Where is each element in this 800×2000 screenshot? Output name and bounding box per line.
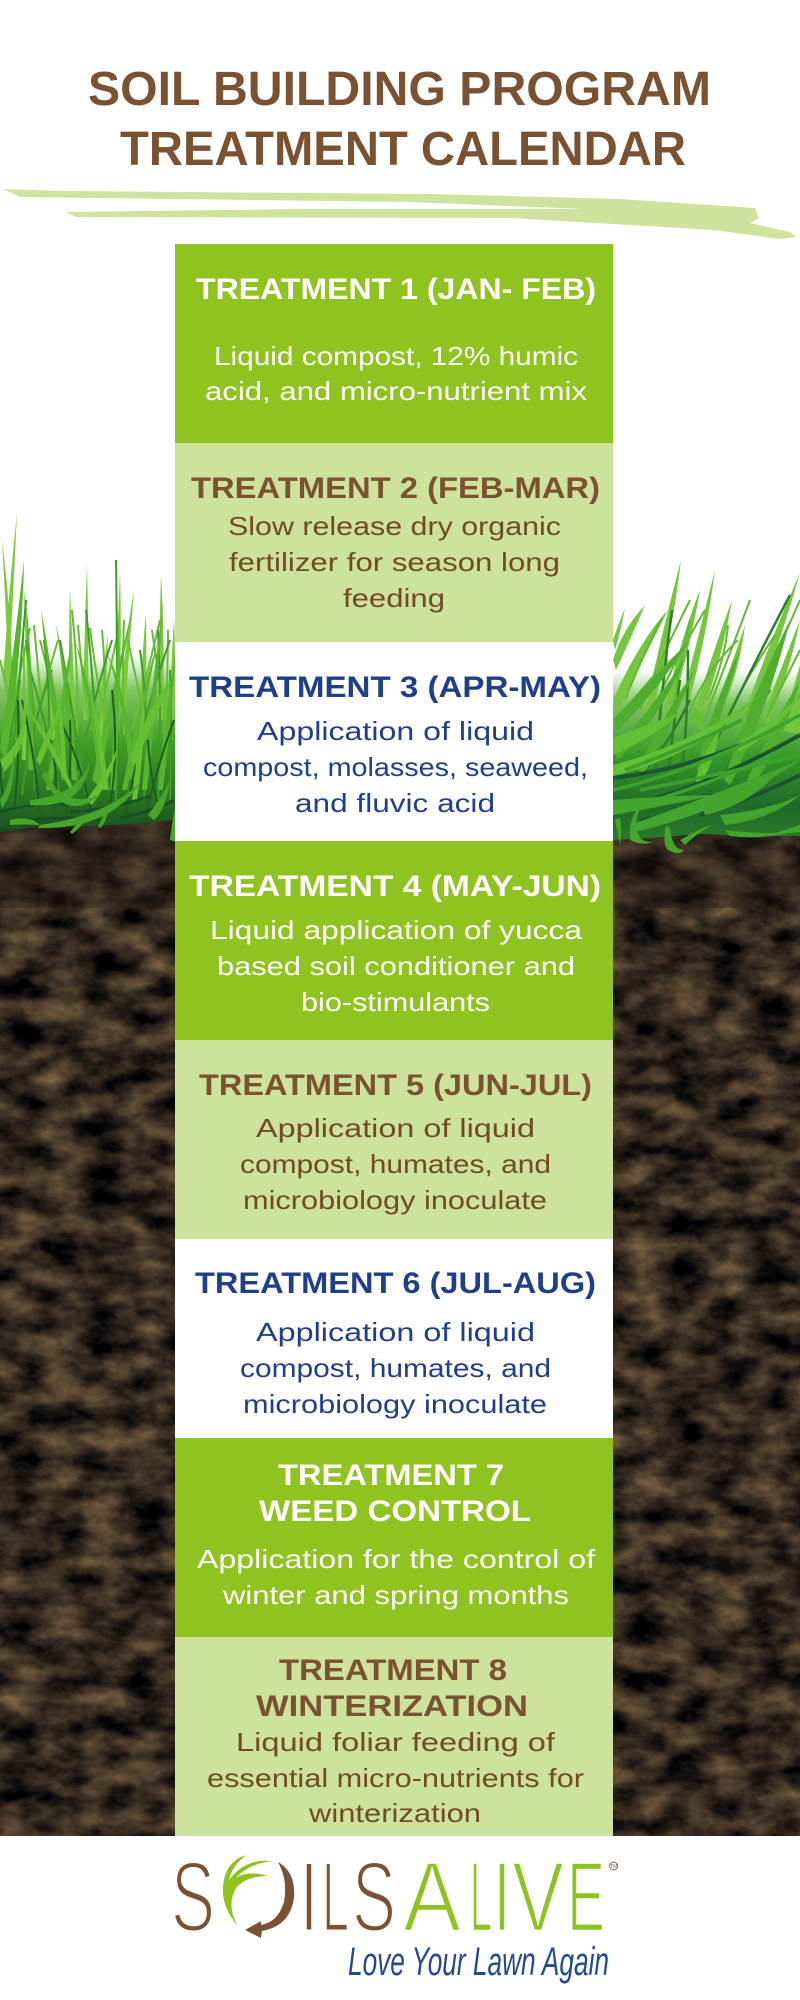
- panel: treatment 1: [175, 244, 613, 443]
- title: SOIL BUILDING PROGRAM: [88, 63, 711, 116]
- description: treatment 5: compost, humates, and: [240, 1149, 551, 1179]
- description: treatment 8: winterization: [308, 1798, 481, 1828]
- tagline: Love Your Lawn Again: [348, 1940, 609, 1984]
- panel: treatment 2: [175, 443, 613, 642]
- description: treatment 4: bio-stimulants: [301, 987, 490, 1017]
- description: treatment 6: Application of liquid: [256, 1317, 535, 1347]
- description: treatment 3: compost, molasses, seaweed,: [203, 752, 588, 782]
- grass: right clump: [613, 560, 800, 853]
- title: TREATMENT CALENDAR: [120, 123, 686, 176]
- trademark symbol: TM: [610, 1864, 617, 1870]
- description: treatment 4: [210, 915, 583, 1017]
- brush stroke divider under title: [3, 189, 797, 239]
- description: treatment 4: based soil conditioner and: [217, 951, 575, 981]
- description: treatment 1: acid, and micro-nutrient mix: [205, 376, 587, 406]
- heading: treatment 4: TREATMENT 4 (MAY-JUN): [189, 870, 601, 903]
- description: treatment 5: [240, 1113, 551, 1215]
- logo wordmark: green letters: A: [403, 1841, 461, 1952]
- heading: treatment 8: WINTERIZATION: [256, 1690, 528, 1723]
- description: treatment 6: compost, humates, and: [240, 1353, 551, 1383]
- heading: treatment 8: TREATMENT 8: [279, 1654, 507, 1687]
- description: treatment 3: [203, 716, 588, 818]
- title: [88, 63, 711, 176]
- description: treatment 7: [197, 1544, 596, 1610]
- description: treatment 2: [228, 511, 561, 613]
- description: treatment 7: Application for the control of: [197, 1544, 596, 1574]
- logo wordmark: brown letters: I: [299, 1841, 319, 1952]
- description: treatment 3: Application of liquid: [257, 716, 534, 746]
- panel: treatment 4: [175, 841, 613, 1040]
- logo wordmark: green letters: I: [493, 1841, 511, 1952]
- description: treatment 4: Liquid application of yucca: [210, 915, 583, 945]
- panel: treatment 6: [175, 1239, 613, 1438]
- heading: treatment 6: TREATMENT 6 (JUL-AUG): [195, 1267, 596, 1300]
- description: treatment 2: feeding: [343, 583, 445, 613]
- description: treatment 5: Application of liquid: [256, 1113, 535, 1143]
- description: treatment 2: fertilizer for season long: [229, 547, 560, 577]
- description: treatment 1: Liquid compost, 12% humic: [214, 341, 578, 371]
- heading: treatment 1: TREATMENT 1 (JAN- FEB): [196, 273, 596, 306]
- description: treatment 3: and fluvic acid: [295, 788, 495, 818]
- heading: treatment 7: [259, 1459, 531, 1528]
- logo wordmark: green letters: [403, 1841, 605, 1952]
- heading: treatment 5: TREATMENT 5 (JUN-JUL): [199, 1069, 592, 1102]
- heading: treatment 7: WEED CONTROL: [259, 1495, 531, 1528]
- logo wordmark: green letters: V: [512, 1841, 564, 1952]
- heading: treatment 8: [256, 1654, 528, 1723]
- logo wordmark: brown letters: [171, 1841, 396, 1952]
- panel: treatment 8: [175, 1637, 613, 1836]
- description: treatment 5: microbiology inoculate: [243, 1185, 547, 1215]
- description: treatment 7: winter and spring months: [222, 1580, 569, 1610]
- logo wordmark: green letters: L: [470, 1841, 492, 1952]
- grass: left clump: [0, 513, 176, 842]
- heading: treatment 7: TREATMENT 7: [278, 1459, 504, 1492]
- icon: logo O with leaf and arrow: [223, 1855, 294, 1938]
- description: treatment 2: Slow release dry organic: [228, 511, 561, 541]
- description: treatment 8: Liquid foliar feeding of: [236, 1727, 556, 1757]
- description: treatment 8: [207, 1727, 584, 1828]
- description: treatment 1: [205, 341, 587, 406]
- panel: treatment 7: [175, 1438, 613, 1637]
- heading: treatment 2: TREATMENT 2 (FEB-MAR): [191, 472, 600, 505]
- logo wordmark: green letters: E: [567, 1841, 605, 1952]
- description: treatment 8: essential micro-nutrients for: [207, 1763, 584, 1793]
- soil background: [0, 818, 800, 1836]
- panel: treatment 3: [175, 642, 613, 841]
- description: treatment 6: microbiology inoculate: [243, 1389, 547, 1419]
- logo wordmark: brown letters: S: [352, 1841, 396, 1952]
- description: treatment 6: [240, 1317, 551, 1419]
- logo: Soils Alive: [171, 1841, 618, 1984]
- panel: treatment 5: [175, 1040, 613, 1239]
- logo wordmark: brown letters: S: [171, 1841, 215, 1952]
- logo wordmark: brown letters: L: [322, 1841, 349, 1952]
- trademark symbol: [610, 1862, 618, 1870]
- heading: treatment 3: TREATMENT 3 (APR-MAY): [189, 671, 601, 704]
